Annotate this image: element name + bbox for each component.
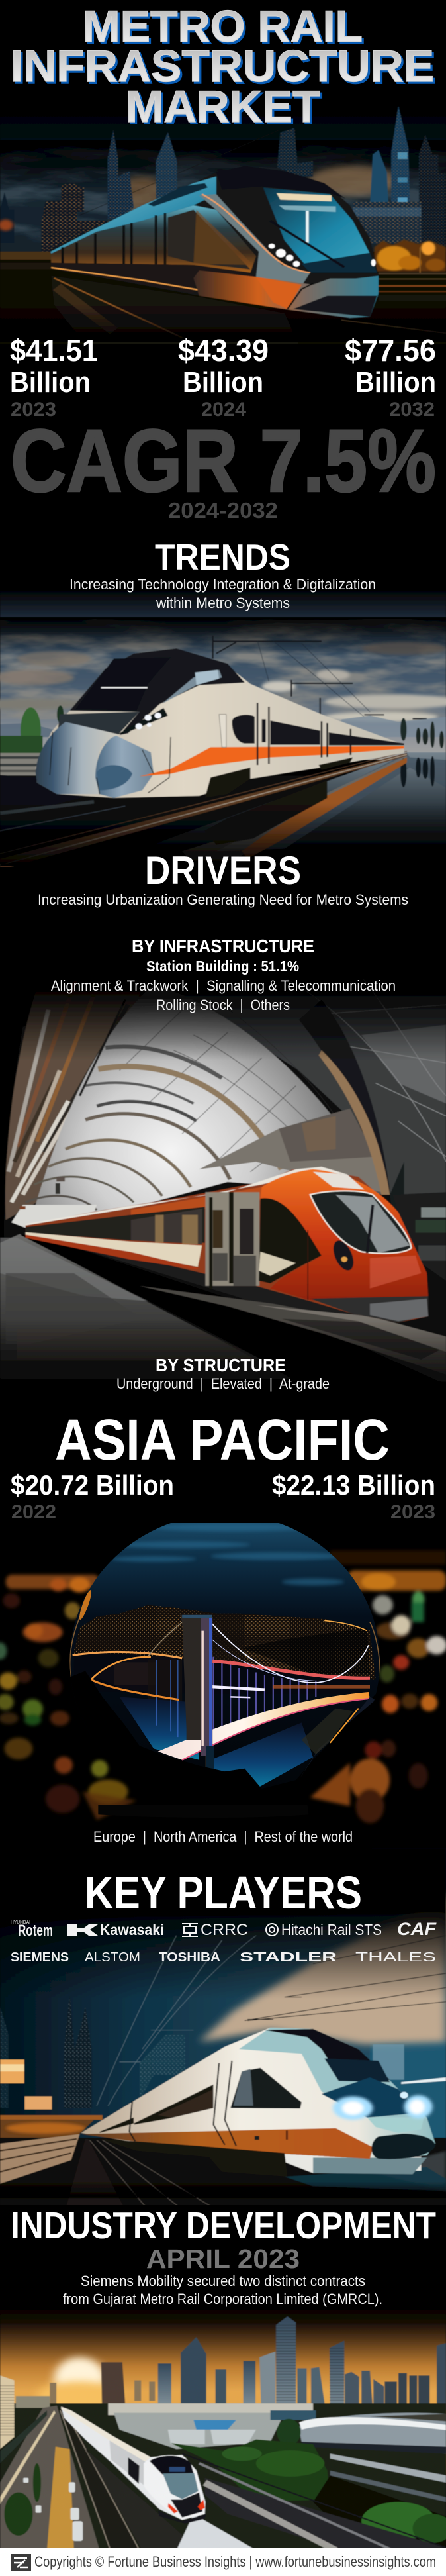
market size figures xyxy=(10,333,436,421)
industry development text: from Gujarat Metro Rail Corporation Limited (GMRCL). xyxy=(63,2291,382,2307)
panel: elevated metro at sunset xyxy=(0,2304,446,2550)
city inside ball xyxy=(74,1605,376,1679)
figure 2032: $77.56 xyxy=(345,333,436,368)
infrastructure segment text: Rolling Stock | Others xyxy=(156,997,290,1013)
infrastructure segment text: Alignment & Trackwork | Signalling & Telecommunication xyxy=(51,977,396,994)
figure 2032 xyxy=(345,333,436,421)
figure 2023: Billion xyxy=(10,366,91,399)
logo: Hitachi Rail STS: Hitachi Rail STS xyxy=(281,1921,382,1938)
asia pacific heading and values xyxy=(11,1408,435,1523)
CAGR headline: 2024-2032 xyxy=(168,498,278,522)
outer vault right xyxy=(183,979,446,1195)
glowing signs and road xyxy=(0,2059,446,2213)
figure 2024 xyxy=(178,333,269,421)
logo: Hyundai Rotem xyxy=(11,1920,53,1940)
low-rise city and stadium xyxy=(0,2375,446,2550)
industry development text: APRIL 2023 xyxy=(146,2244,300,2274)
asia pacific heading and values: $20.72 Billion xyxy=(11,1469,174,1501)
far end and left dark structure xyxy=(0,1026,24,1237)
main vault xyxy=(34,984,386,1213)
logo: Hyundai Rotem: Rotem xyxy=(18,1922,53,1940)
panel: crystal ball with bridge over bokeh city xyxy=(0,1514,446,1823)
figure 2024: 2024 xyxy=(201,399,246,421)
asia pacific heading and values: 2022 xyxy=(11,1501,56,1523)
industry development text xyxy=(11,2204,436,2307)
other regions text: Europe | North America | Rest of the world xyxy=(93,1828,353,1845)
asia pacific heading and values: 2023 xyxy=(390,1501,435,1523)
structure segment text: BY STRUCTURE xyxy=(156,1355,286,1375)
drivers heading and text: DRIVERS xyxy=(145,848,301,893)
main cables xyxy=(148,1622,369,1683)
title: INFRASTRUCTURE xyxy=(11,41,434,91)
trends heading and text: within Metro Systems xyxy=(156,595,290,611)
ground and glowing trees xyxy=(0,219,446,344)
panel: high speed train at dusk xyxy=(0,1848,446,2213)
figure 2023: $41.51 xyxy=(10,333,98,368)
water xyxy=(120,1697,199,1760)
train xyxy=(26,1167,428,1322)
panel: station vault with orange train xyxy=(0,978,446,1381)
logo: Kawasaki: Kawasaki xyxy=(100,1921,164,1938)
train xyxy=(81,2028,435,2177)
arches xyxy=(26,999,282,1210)
title xyxy=(11,1,436,134)
figure 2032: Billion xyxy=(355,366,436,399)
hanger cables xyxy=(213,1657,316,1734)
title: METRO RAIL xyxy=(83,1,363,52)
logo: Toshiba: TOSHIBA xyxy=(159,1950,220,1965)
foreground silhouette xyxy=(71,1671,376,1797)
logo: Stadler: STADLER xyxy=(240,1950,337,1965)
viaduct and rails xyxy=(58,2406,446,2550)
overhead wires xyxy=(245,1936,446,2020)
logo: Siemens: SIEMENS xyxy=(11,1950,69,1965)
structure segment text xyxy=(116,1355,330,1392)
lower road xyxy=(158,1692,370,1760)
logo: CAF: CAF xyxy=(397,1919,437,1939)
right platform background xyxy=(399,1192,446,1281)
left wall mosaic xyxy=(4,981,140,1220)
train xyxy=(36,648,404,798)
figure 2023 xyxy=(10,333,98,421)
train xyxy=(61,2407,206,2524)
drivers heading and text xyxy=(38,848,408,908)
headlights xyxy=(333,2092,433,2120)
horizon xyxy=(341,716,446,737)
city skyline xyxy=(0,106,446,254)
logo: Kawasaki xyxy=(67,1921,164,1938)
logo: CRRC xyxy=(182,1921,248,1939)
lower right dark glazing xyxy=(199,1109,381,1192)
panel: silver and orange train over water xyxy=(0,587,446,870)
logo: Hyundai Rotem: HYUNDAI xyxy=(11,1920,30,1925)
logo: Thales: THALES xyxy=(355,1950,436,1965)
title: MARKET xyxy=(126,81,320,132)
trends heading and text: TRENDS xyxy=(155,536,290,577)
skyline xyxy=(50,2316,446,2410)
panel: hero metro train at night xyxy=(0,104,446,344)
bridge tower xyxy=(180,1615,212,1769)
key player logos xyxy=(11,1919,437,1965)
logo: Alstom: ALSTOM xyxy=(85,1950,140,1965)
industry development text: Siemens Mobility secured two distinct contracts xyxy=(81,2273,365,2289)
clouds xyxy=(0,617,446,722)
infrastructure segment text: BY INFRASTRUCTURE xyxy=(132,936,314,956)
crystal ball xyxy=(69,1523,380,1789)
poles xyxy=(213,636,427,719)
figure 2032: 2032 xyxy=(389,399,435,421)
trends heading and text xyxy=(69,536,376,611)
infrastructure segment text xyxy=(51,936,396,1013)
asia pacific heading and values: ASIA PACIFIC xyxy=(55,1408,390,1472)
deck lines xyxy=(73,1652,182,1658)
figure 2024: Billion xyxy=(183,366,263,399)
figure 2024: $43.39 xyxy=(178,333,269,368)
footer bar xyxy=(0,2548,446,2576)
title: INFRASTRUCTURE xyxy=(13,43,436,93)
figure 2023: 2023 xyxy=(11,399,56,421)
title: MARKET xyxy=(128,83,322,134)
water and reflection xyxy=(0,752,446,870)
train xyxy=(51,166,379,318)
platform floor xyxy=(0,1233,446,1381)
bokeh background xyxy=(0,1550,446,1823)
distant towers xyxy=(0,1995,185,2108)
key players heading: KEY PLAYERS xyxy=(85,1867,362,1918)
asia pacific heading and values: $22.13 Billion xyxy=(272,1469,435,1501)
logo: Fortune Business Insights xyxy=(11,2554,31,2571)
logo: CRRC: CRRC xyxy=(201,1921,248,1939)
road xyxy=(0,2406,99,2550)
drivers heading and text: Increasing Urbanization Generating Need for Metro Systems xyxy=(38,891,408,908)
title: METRO RAIL xyxy=(85,3,365,54)
trees xyxy=(171,2419,446,2550)
structure segment text: Underground | Elevated | At-grade xyxy=(116,1375,330,1392)
trends heading and text: Increasing Technology Integration & Digitalization xyxy=(69,576,376,593)
infrastructure segment text: Station Building : 51.1% xyxy=(146,958,299,975)
